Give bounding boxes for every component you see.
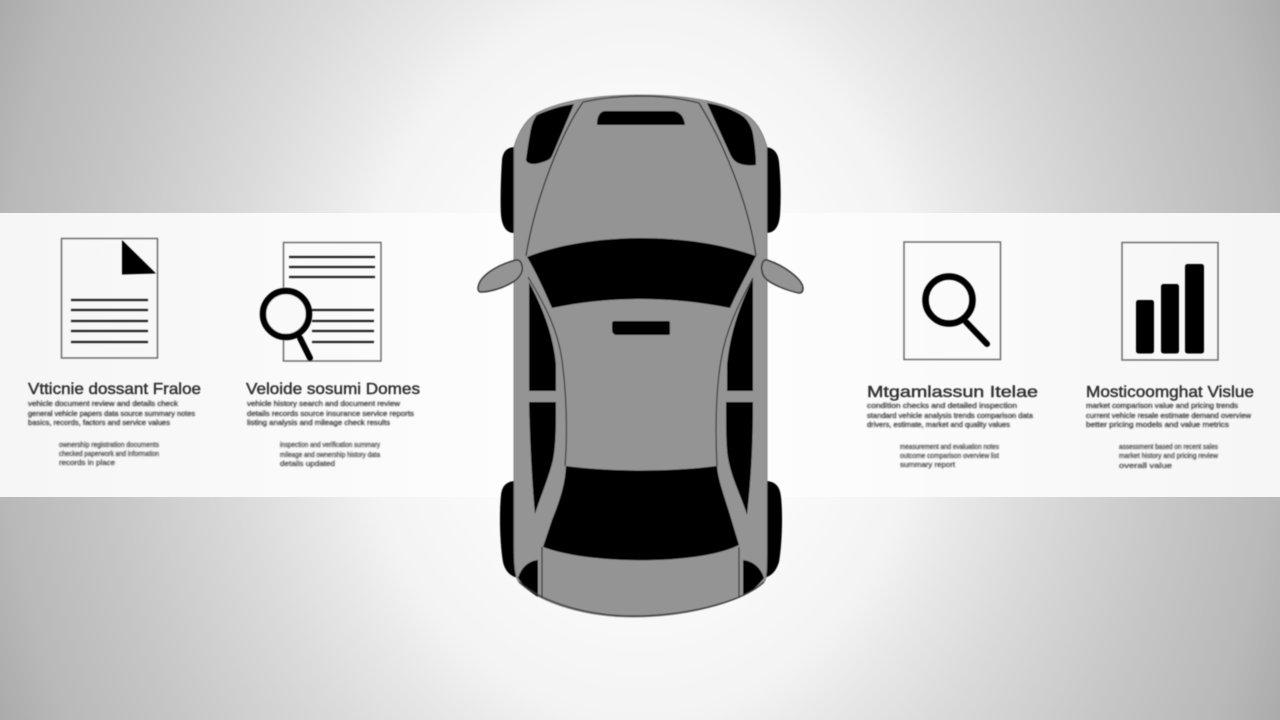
note: market history and pricing review — [1119, 451, 1219, 460]
note — [59, 440, 159, 467]
note: checked paperwork and information — [59, 449, 159, 458]
medium bar — [1161, 284, 1179, 354]
description: condition checks and detailed inspection — [867, 401, 1017, 410]
heading: Mosticoomghat Vislue — [1086, 384, 1254, 401]
description: basics, records, factors and service values — [28, 418, 170, 427]
note: ownership registration documents — [59, 440, 159, 449]
note: measurement and evaluation notes — [900, 442, 999, 451]
rear window — [543, 466, 739, 560]
icon: document with folded corner — [62, 238, 158, 358]
right headlight — [707, 103, 756, 165]
right rear side window — [726, 402, 753, 515]
left rear side window — [529, 402, 556, 514]
small bar — [1136, 300, 1154, 354]
description: general vehicle papers data source summary notes — [28, 409, 195, 418]
description: market comparison value and pricing trends — [1086, 401, 1238, 410]
description — [28, 399, 195, 427]
left front side window — [529, 282, 556, 391]
left tail light — [518, 560, 538, 597]
roof vent — [612, 321, 670, 335]
right roof line — [716, 278, 753, 466]
description — [1086, 401, 1252, 429]
description: current vehicle resale estimate demand overview — [1086, 411, 1252, 420]
heading: Vtticnie dossant Fraloe — [28, 381, 201, 398]
note: assessment based on recent sales — [1119, 442, 1218, 451]
note — [280, 440, 381, 468]
rear right wheel — [764, 481, 782, 578]
description: standard vehicle analysis trends comparison data — [867, 411, 1034, 420]
description: better pricing models and value metrics — [1086, 420, 1229, 429]
windshield — [527, 238, 756, 308]
note: outcome comparison overview list — [900, 451, 1000, 460]
icon: bar chart — [1122, 242, 1218, 360]
description: details records source insurance service reports — [247, 409, 414, 418]
description — [867, 401, 1034, 429]
icon: document with magnifier — [263, 242, 381, 361]
right front side window — [727, 279, 753, 391]
front left wheel — [501, 147, 514, 233]
hood vent — [597, 111, 685, 125]
hood outline — [526, 96, 756, 256]
left mirror — [478, 260, 522, 292]
right mirror — [762, 260, 803, 293]
note: records in place — [59, 458, 115, 467]
car illustration, top view — [478, 95, 803, 617]
description: vehicle document review and details check — [28, 399, 178, 408]
note: summary report — [900, 460, 956, 469]
heading: Veloide sosumi Domes — [246, 381, 420, 398]
panel: inspection — [867, 242, 1038, 469]
panel: document feature — [28, 238, 201, 467]
car body — [514, 95, 767, 617]
note — [1119, 442, 1219, 470]
note: mileage and ownership history data — [280, 450, 381, 459]
rear bumper line — [519, 582, 764, 616]
left roof line — [528, 277, 566, 466]
description: listing analysis and mileage check results — [247, 418, 390, 427]
note: overall value — [1119, 461, 1172, 470]
note: details updated — [280, 459, 335, 468]
tall bar — [1185, 264, 1204, 354]
right tail light — [743, 560, 764, 596]
panel: document search — [246, 242, 420, 468]
icon: magnifier — [904, 242, 1000, 360]
note: inspection and verification summary — [280, 440, 380, 449]
description: drivers, estimate, market and quality values — [867, 420, 1010, 429]
description — [247, 399, 414, 427]
front right wheel — [766, 147, 781, 233]
description: vehicle history search and document review — [247, 399, 401, 408]
note — [900, 442, 1000, 469]
panel: market value — [1086, 242, 1254, 470]
trunk lines — [542, 547, 739, 598]
left headlight — [526, 104, 574, 164]
heading: Mtgamlassun Itelae — [867, 384, 1038, 401]
rear left wheel — [500, 481, 518, 578]
